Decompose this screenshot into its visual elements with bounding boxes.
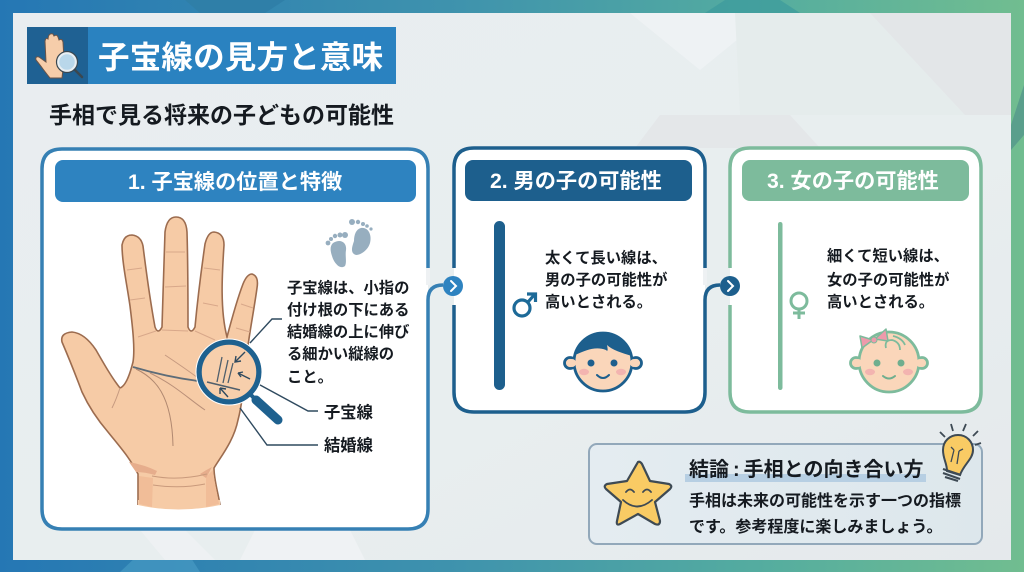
icon: magnifying glass [196, 339, 278, 420]
panel: 男の子の可能性 [454, 148, 720, 412]
leader lines [238, 319, 318, 445]
text: explanation: 結婚線の上に伸び [287, 323, 410, 341]
subtitle: 手相で見る将来の子どもの可能性 [49, 102, 394, 128]
arrow: panel 1 to 2 [443, 276, 463, 296]
conclusion text: 手相は未来の可能性を示す一つの指標 [689, 491, 961, 510]
text: explanation: 子宝線は、小指の [287, 279, 409, 297]
title banner: 子宝線の見方と意味 [98, 39, 383, 75]
icon: star [605, 462, 671, 525]
conclusion text: です。参考程度に楽しみましょう。 [689, 517, 942, 536]
text: explanation: こと。 [287, 369, 333, 386]
text: explanation: 付け根の下にある [287, 302, 409, 319]
arrow: panel 2 to 3 [720, 276, 740, 296]
icon: male symbol [514, 294, 536, 316]
text: explanation: る細かい縦線の [287, 345, 394, 363]
panel: 女の子の可能性 [730, 148, 981, 412]
heading: panel 3 [742, 160, 969, 201]
text: male: 太くて長い線は、 [545, 249, 667, 267]
label: 子宝線: 子宝線 [324, 403, 374, 422]
heading: panel 1 [55, 160, 416, 202]
line sample: thick [494, 221, 505, 390]
icon: footprints [326, 219, 373, 267]
text: female: 高いとされる。 [827, 294, 934, 311]
hand illustration [62, 217, 257, 510]
conclusion text [689, 491, 961, 536]
panel: 子宝線の位置と特徴 [42, 149, 443, 529]
icon: female symbol [791, 293, 807, 319]
conclusion heading: 結論:手相との向き合い方 [689, 458, 923, 481]
text: male: 高いとされる。 [545, 294, 652, 311]
icon: baby boy [564, 332, 642, 391]
text: female: 細くて短い線は、 [827, 247, 949, 265]
text: male [545, 249, 667, 311]
icon: light bulb [940, 424, 981, 481]
text: explanation [287, 279, 410, 386]
heading: panel 2: 2. 男の子の可能性 [490, 169, 662, 193]
text: male: 男の子の可能性が [545, 271, 667, 289]
line sample: thin [778, 222, 782, 390]
heading: panel 2 [465, 160, 692, 201]
highlight bar [685, 474, 926, 482]
text: female: 女の子の可能性が [827, 271, 949, 289]
icon: baby girl [850, 329, 928, 392]
panel: conclusion [589, 424, 982, 544]
heading: panel 3: 3. 女の子の可能性 [767, 169, 939, 193]
title banner [27, 27, 396, 84]
icon: hand with magnifier [36, 34, 82, 78]
heading: panel 1: 1. 子宝線の位置と特徴 [128, 170, 342, 194]
label: 結婚線: 結婚線 [324, 436, 374, 455]
text: female [827, 247, 949, 311]
